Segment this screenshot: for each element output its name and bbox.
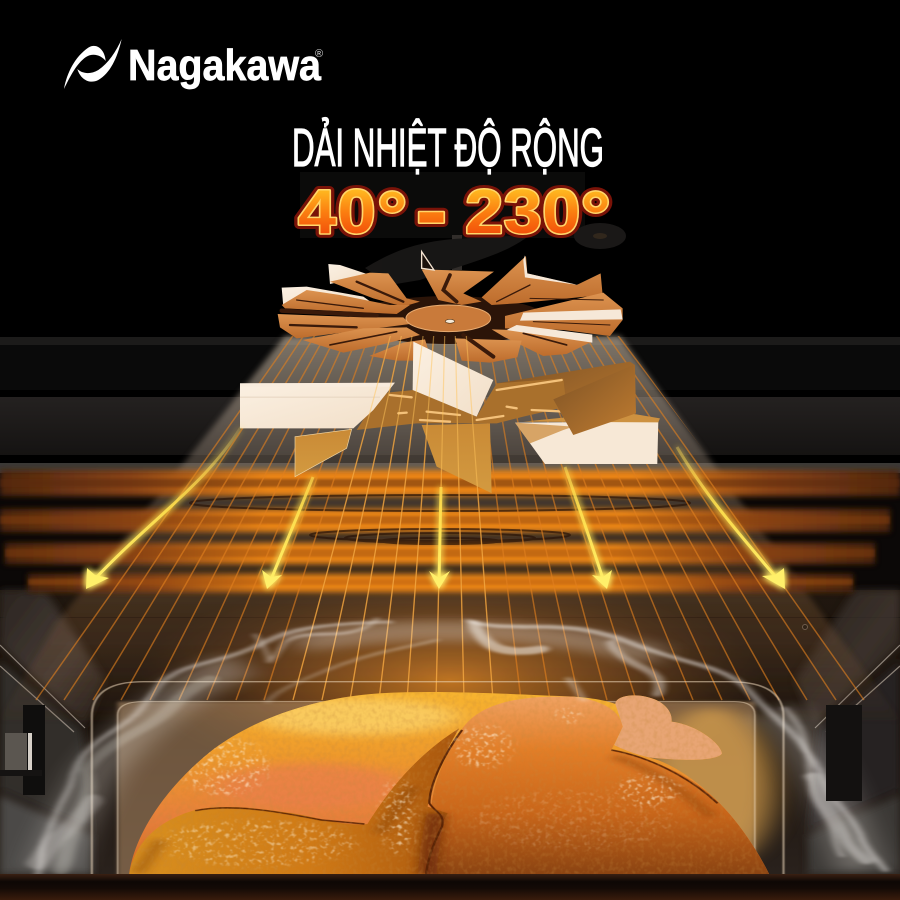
temperature range: ° <box>377 178 407 254</box>
temperature range: 230 <box>465 177 580 246</box>
glass tray <box>92 682 784 875</box>
chicken highlights <box>154 706 686 869</box>
chicken drumstick tip <box>614 695 722 760</box>
chicken breast shading <box>253 698 459 735</box>
fan recess rings <box>190 495 690 544</box>
lower fan white left blade <box>240 383 395 428</box>
temperature range: - <box>416 163 447 259</box>
chicken wing <box>129 728 459 875</box>
chicken dark folds <box>138 757 712 875</box>
logo mark <box>64 39 122 89</box>
roasting tray and chicken <box>34 618 884 880</box>
heating rods <box>0 470 900 592</box>
logo <box>64 39 323 90</box>
lower fan center blade <box>422 423 492 493</box>
temperature range: - <box>416 163 447 259</box>
chicken skin texture <box>129 690 772 877</box>
heat beam <box>0 336 900 720</box>
lower fan right copper blade <box>497 362 636 435</box>
chicken body <box>115 687 781 880</box>
motor mount behind fan <box>300 172 626 285</box>
upper fan <box>278 252 623 363</box>
oven door edge <box>0 874 900 900</box>
heat rays <box>36 336 864 700</box>
left door latch <box>0 705 45 795</box>
right door latch <box>826 705 862 801</box>
temperature range: 40 <box>298 177 376 246</box>
rod 2 <box>0 509 890 532</box>
heat arrows <box>86 427 785 589</box>
lower fan white center blade <box>413 342 493 417</box>
upper fan white edges <box>507 255 623 343</box>
temperature range: 230 <box>465 177 580 246</box>
temperature range: 40 <box>298 177 376 246</box>
rays over lower blades <box>292 336 493 700</box>
upper fan white blade faces <box>282 264 380 308</box>
upper fan spike <box>422 252 434 270</box>
lower fan <box>240 342 660 493</box>
lower fan front copper panel <box>553 365 636 435</box>
temperature range <box>298 163 611 259</box>
logo wordmark: Nagakawa <box>128 41 321 90</box>
temperature range: ° <box>581 178 611 254</box>
rod 1 <box>0 470 900 496</box>
rod 4 <box>28 574 853 592</box>
temperature range: ° <box>581 178 611 254</box>
smoke wisps <box>34 618 884 872</box>
arrow 2 <box>262 477 313 589</box>
lower fan hub rings <box>390 380 567 422</box>
upper fan dark core <box>348 296 548 344</box>
title: DẢI NHIỆT ĐỘ RỘNG <box>292 118 604 178</box>
temperature range: ° <box>377 178 407 254</box>
inner warm glow <box>118 702 755 877</box>
upper fan hub <box>406 305 491 332</box>
arrow 5 <box>677 447 785 589</box>
registered mark: ® <box>315 48 323 60</box>
lower fan hub plate <box>357 378 567 430</box>
chicken right side <box>425 696 769 875</box>
arrow 1 <box>86 427 241 589</box>
smoke haze <box>52 631 861 870</box>
lower fan white right blade <box>515 413 660 464</box>
rod 3 <box>5 543 875 564</box>
lower fan gold blade tip <box>295 429 352 477</box>
upper fan copper blades <box>278 256 623 363</box>
arrow 4 <box>565 467 612 589</box>
chicken crease <box>195 730 717 875</box>
arrow 3 <box>429 487 450 589</box>
upper fan dark slots <box>282 275 610 357</box>
